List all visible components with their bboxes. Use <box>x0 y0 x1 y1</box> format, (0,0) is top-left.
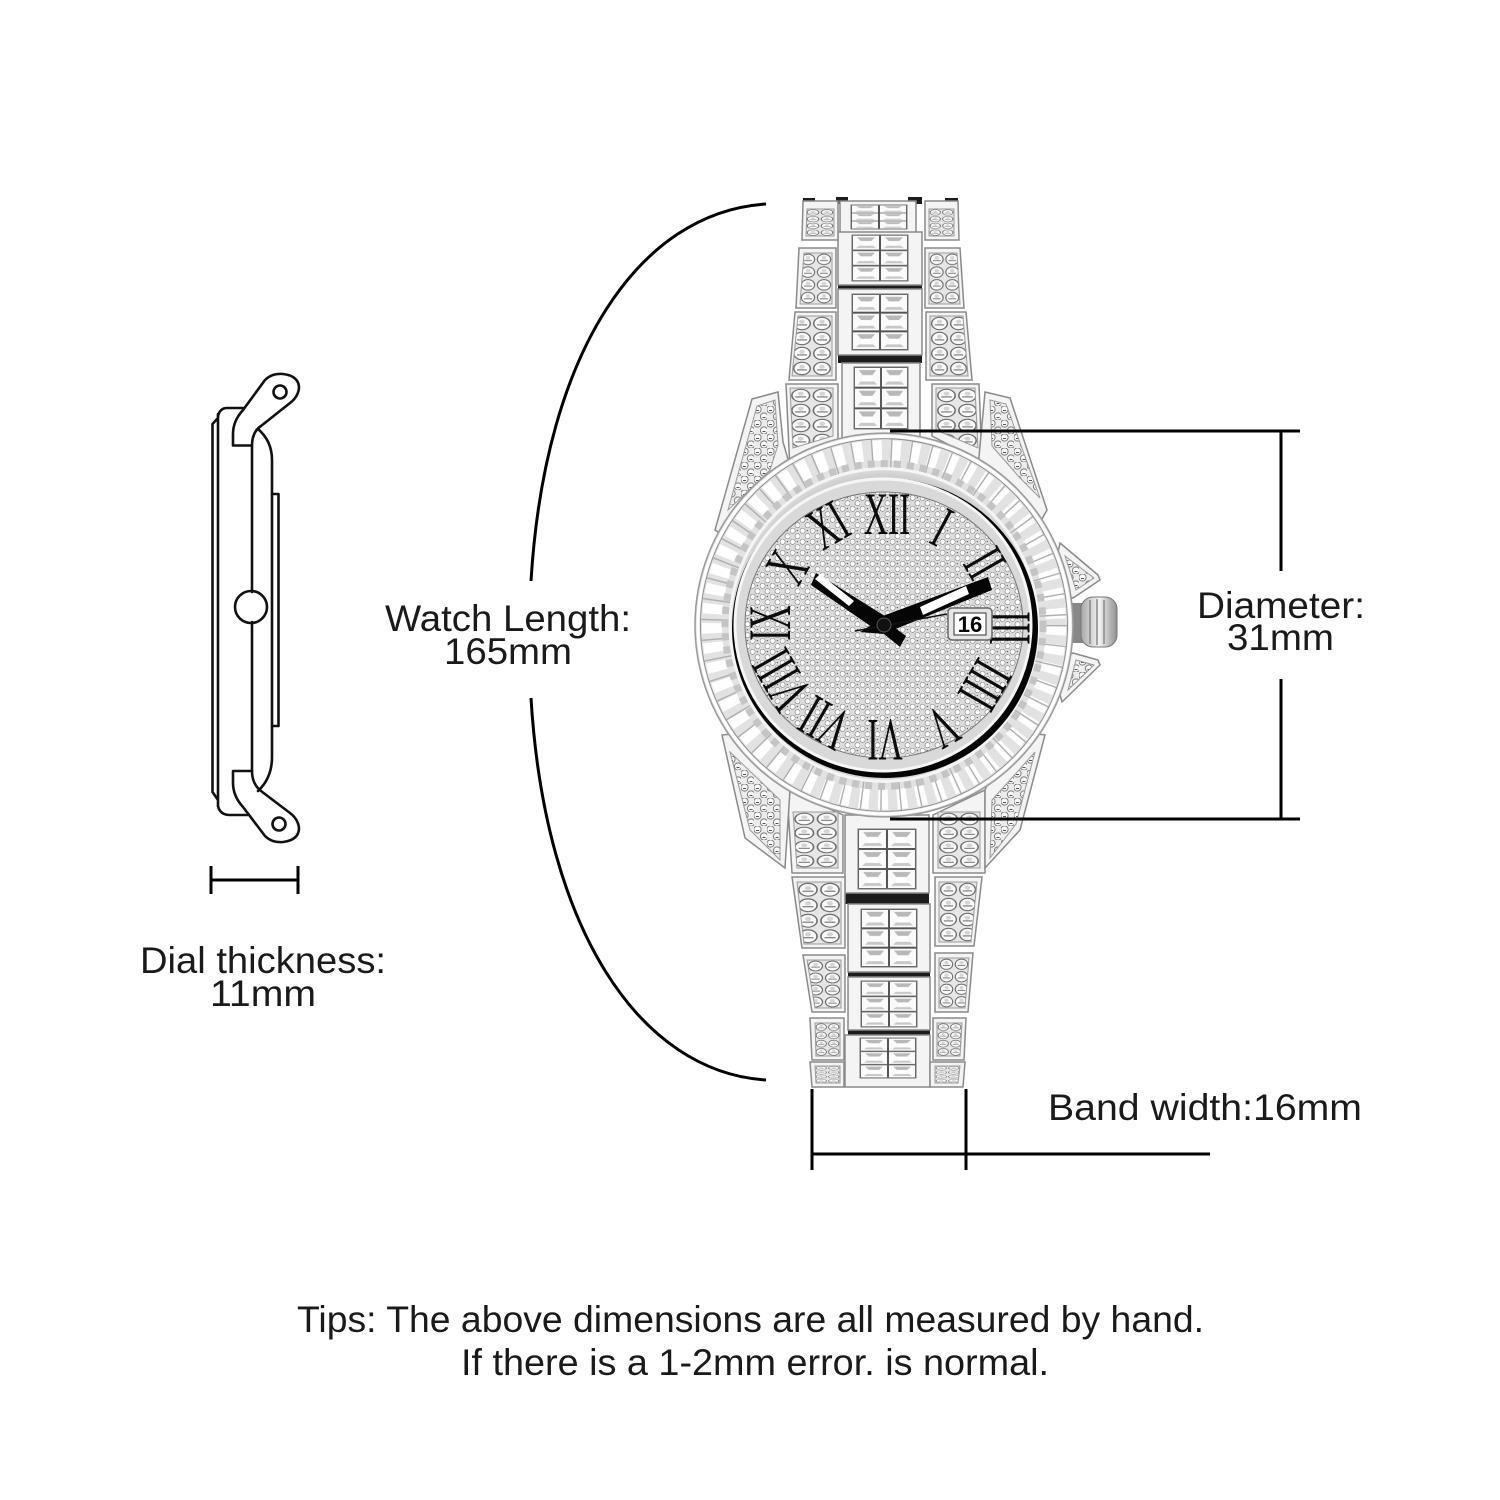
watch length label: 165mm <box>444 631 572 672</box>
black inner rehaut ring <box>732 478 1038 778</box>
bottom bracelet right links <box>930 790 985 1087</box>
watch photo illustration <box>695 197 1117 1087</box>
top lug <box>233 374 299 446</box>
date window <box>948 608 992 640</box>
top bracelet right links <box>925 201 982 462</box>
tips note <box>297 1299 1204 1383</box>
top lug hole <box>274 386 286 398</box>
band width label: Band width:16mm <box>1048 1087 1362 1128</box>
roman numerals: V <box>916 692 970 762</box>
roman numerals: III <box>976 611 1043 645</box>
roman numerals: IX <box>737 605 804 641</box>
roman numerals: IIII <box>945 649 1025 721</box>
bottom bracelet center links <box>845 815 930 1087</box>
side view diagram <box>212 374 299 842</box>
diameter label: Diameter: <box>1197 585 1365 626</box>
watch length arc bottom <box>531 698 766 1080</box>
diameter label <box>1197 585 1365 658</box>
date window: 16 <box>958 612 982 637</box>
watch length arc top <box>531 204 766 581</box>
bottom bracelet <box>787 790 985 1087</box>
tips note: If there is a 1-2mm error. is normal. <box>461 1342 1049 1383</box>
top bracelet <box>786 197 982 470</box>
diameter dimension lines <box>890 431 1300 819</box>
roman numerals: II <box>950 537 1019 589</box>
roman numerals: VIII <box>739 638 826 722</box>
crown guards <box>1050 543 1100 702</box>
band width dimension lines <box>812 1089 1210 1170</box>
roman numerals: VII <box>788 682 862 763</box>
roman numerals <box>737 481 1043 773</box>
crown <box>1070 597 1117 647</box>
watch length label <box>385 598 631 672</box>
tips note: Tips: The above dimensions are all measured by hand. <box>297 1299 1204 1340</box>
bottom lug <box>233 771 299 842</box>
top bracelet center links <box>838 232 922 441</box>
top bracelet left links <box>786 201 838 470</box>
roman numerals: VI <box>867 706 903 773</box>
case lugs <box>715 392 1047 868</box>
dial thickness bracket <box>211 866 298 894</box>
roman numerals: XI <box>796 488 860 563</box>
crown circle <box>235 591 267 623</box>
bottom bracelet left links <box>787 790 845 1087</box>
bottom lug hole <box>272 818 286 830</box>
roman numerals: X <box>752 540 822 594</box>
baguette bezel <box>695 433 1073 817</box>
diameter label: 31mm <box>1227 617 1334 658</box>
watch hands <box>811 573 992 647</box>
top bracelet end row <box>840 201 916 233</box>
watch case side profile <box>212 408 278 815</box>
roman numerals: I <box>921 495 962 559</box>
watch length label: Watch Length: <box>385 598 631 639</box>
dial thickness label <box>140 940 386 1014</box>
silver inner ring <box>735 479 1031 771</box>
dial thickness label: 11mm <box>210 973 316 1014</box>
pave dial <box>745 492 1023 758</box>
roman numerals: XII <box>864 481 910 548</box>
dial thickness label: Dial thickness: <box>140 940 386 981</box>
